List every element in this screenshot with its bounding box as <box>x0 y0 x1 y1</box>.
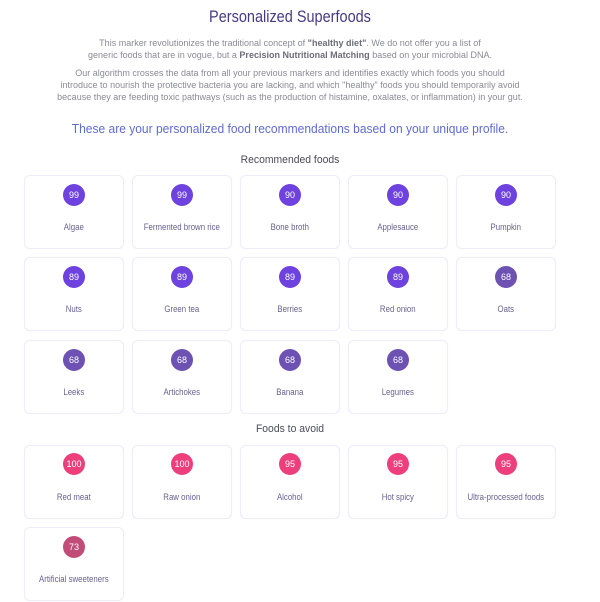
card: Green tea: Green tea <box>165 304 200 314</box>
intro paragraph: This marker revolutionizes the traditional concept of "healthy diet". We do not offer you a list of <box>99 38 481 49</box>
card: Alcohol: Alcohol <box>277 492 303 502</box>
card: Algae <box>24 175 124 249</box>
card: Legumes: Legumes <box>382 387 414 397</box>
card: Raw onion: Raw onion <box>164 492 201 502</box>
card: Bone broth: Bone broth <box>271 222 309 232</box>
card: Fermented brown rice: 99 <box>177 190 187 200</box>
card: Nuts: 89 <box>69 272 79 282</box>
card: Berries: Berries <box>278 304 302 314</box>
panel: foods to avoid <box>24 445 556 601</box>
subtitle: These are your personalized food recommendations based on your unique profile. <box>72 121 508 136</box>
card: Banana: Banana <box>277 387 304 397</box>
card: Berries <box>240 257 340 331</box>
card: Red onion: Red onion <box>380 304 416 314</box>
card: Algae: Algae <box>64 222 84 232</box>
card: Applesauce: Applesauce <box>378 222 419 232</box>
card: Artificial sweeteners <box>24 527 124 601</box>
card: Legumes <box>348 340 448 414</box>
card: Applesauce <box>348 175 448 249</box>
card: Banana: 68 <box>285 355 295 365</box>
card: Algae: 99 <box>69 190 79 200</box>
card: Bone broth <box>240 175 340 249</box>
card: Nuts: Nuts <box>66 304 82 314</box>
card: Artificial sweeteners: 73 <box>69 542 79 552</box>
card: Ultra-processed foods: Ultra-processed foods <box>468 492 544 502</box>
card: Artichokes: Artichokes <box>164 387 200 397</box>
card: Hot spicy: Hot spicy <box>382 492 414 502</box>
card: Raw onion <box>132 444 232 518</box>
title: Personalized Superfoods <box>209 8 371 26</box>
panel: recommended foods <box>24 175 556 414</box>
card: Artichokes <box>132 340 232 414</box>
card: Artichokes: 68 <box>177 355 187 365</box>
card: Applesauce: 90 <box>393 190 403 200</box>
card: Leeks: Leeks <box>64 387 85 397</box>
card: Bone broth: 90 <box>285 190 295 200</box>
algorithm paragraph: because they are feeding toxic pathways (such as the production of histamine, oxalates, or inflammation) in your gut. <box>57 92 523 103</box>
card: Raw onion: 100 <box>174 459 190 469</box>
card: Oats <box>456 257 556 331</box>
card: Alcohol <box>240 444 340 518</box>
algorithm paragraph: introduce to nourish the protective bacteria you are lacking, and which "healthy" foods you should temporarily avoid <box>60 80 520 91</box>
card: Pumpkin: 90 <box>501 190 511 200</box>
card: Fermented brown rice: Fermented brown rice <box>144 222 220 232</box>
card: Artificial sweeteners: Artificial sweeteners <box>39 574 109 584</box>
card: Red meat: Red meat <box>57 492 91 502</box>
card: Ultra-processed foods: 95 <box>501 459 511 469</box>
card: Pumpkin: Pumpkin <box>491 222 521 232</box>
heading: foods to avoid: Foods to avoid <box>256 423 324 435</box>
card: Leeks: 68 <box>69 355 79 365</box>
card: Green tea <box>132 257 232 331</box>
card: Berries: 89 <box>285 272 295 282</box>
card: Alcohol: 95 <box>285 459 295 469</box>
card: Oats: Oats <box>498 304 514 314</box>
card: Red onion: 89 <box>393 272 403 282</box>
card: Ultra-processed foods <box>456 444 556 518</box>
algorithm paragraph: Our algorithm crosses the data from all your previous markers and identifies exactly which foods you should <box>75 68 505 79</box>
card: Legumes: 68 <box>393 355 403 365</box>
intro paragraph <box>88 38 492 61</box>
card: Leeks <box>24 340 124 414</box>
card: Green tea: 89 <box>177 272 187 282</box>
card: Nuts <box>24 257 124 331</box>
card: Fermented brown rice <box>132 175 232 249</box>
card: Hot spicy <box>348 444 448 518</box>
card: Red meat <box>24 444 124 518</box>
algorithm paragraph <box>57 68 523 103</box>
card: Oats: 68 <box>501 272 511 282</box>
card: Pumpkin <box>456 175 556 249</box>
card: Hot spicy: 95 <box>393 459 403 469</box>
card: Banana <box>240 340 340 414</box>
card: Red onion <box>348 257 448 331</box>
intro paragraph: generic foods that are in vogue, but a Precision Nutritional Matching based on your microbial DNA. <box>88 50 492 61</box>
heading: recommended foods: Recommended foods <box>241 154 339 166</box>
card: Red meat: 100 <box>66 459 82 469</box>
